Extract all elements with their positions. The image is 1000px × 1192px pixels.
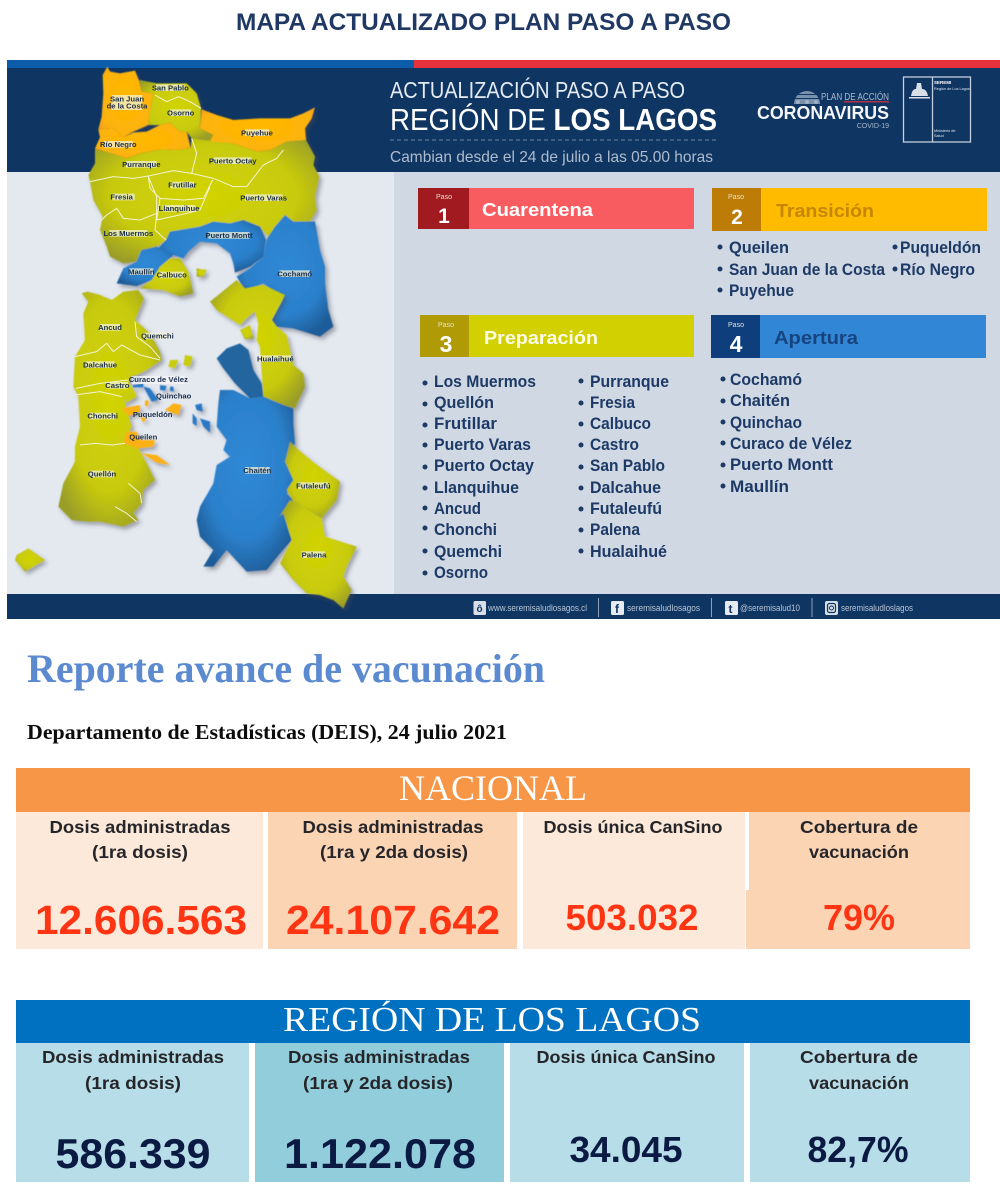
heading: actualización: ACTUALIZACIÓN PASO A PASO	[390, 77, 685, 103]
card: Región 1ra y 2da dosis: (1ra y 2da dosis)	[303, 1073, 453, 1093]
logo: seremi de salud	[904, 77, 970, 142]
map place labels	[83, 83, 331, 559]
card: Región 1ra dosis: (1ra dosis)	[85, 1073, 181, 1093]
step 3 header: Preparación: Preparación	[484, 327, 598, 348]
banner navy header	[7, 68, 1000, 172]
footer social links	[474, 598, 913, 617]
region: Hualaihué	[210, 280, 305, 408]
card: Nacional 1ra dosis: (1ra dosis)	[92, 842, 188, 862]
labels north: San Pablo	[152, 83, 189, 92]
step 2 header: Transición	[712, 188, 987, 231]
labels south: Castro	[105, 381, 130, 390]
step 3 list: Castro	[590, 435, 639, 454]
subheading: date: Cambian desde el 24 de julio a las 05.00 horas	[390, 149, 713, 166]
labels north: Puerto Montt	[205, 231, 253, 240]
twitter link: t	[728, 602, 732, 616]
step 3 list	[422, 372, 669, 582]
Nacional header: NACIONAL	[399, 768, 587, 808]
step 3 list: Ancud	[434, 499, 481, 518]
region: Cochamó	[237, 215, 333, 337]
Región header	[16, 999, 970, 1043]
region: Chaitén north	[217, 343, 263, 398]
step 3 list: Hualaihué	[590, 542, 667, 561]
step 4 list: Puerto Montt	[730, 455, 833, 474]
step 3 list: Osorno	[434, 563, 488, 582]
panel: Región de Los Lagos	[16, 999, 970, 1182]
labels north: Los Muermos	[103, 229, 153, 238]
labels north: Maullín	[128, 267, 155, 276]
step 2 header: Transición: Transición	[776, 200, 874, 221]
card: Nacional 1ra y 2da dosis	[268, 812, 517, 949]
region: San Juan de la Costa	[98, 67, 153, 137]
labels south: Ancud	[98, 323, 122, 332]
step 4 header: Apertura: Paso	[728, 322, 744, 329]
website link: ô	[476, 604, 483, 615]
card: Nacional CanSino: 503.032	[566, 897, 698, 938]
step 4 header: Apertura: 4	[730, 331, 743, 357]
card: Región CanSino: 34.045	[570, 1129, 682, 1170]
card: Región cobertura	[750, 1043, 970, 1182]
labels south: Dalcahue	[83, 360, 117, 369]
banner navy footer	[7, 594, 1000, 619]
website link: www.seremisaludlosagos.cl	[487, 603, 587, 613]
region: Puerto Montt	[158, 220, 266, 273]
labels south: Quellón	[88, 470, 117, 479]
region: Calbuco	[140, 258, 193, 297]
region: small Dalcahue islands	[120, 355, 193, 403]
step 4 header: Apertura: Apertura	[774, 327, 859, 348]
panel: Paso a Paso banner	[7, 60, 1000, 619]
card: Región cobertura: vacunación	[809, 1073, 909, 1093]
region: Palena	[279, 500, 357, 608]
labels south: Hualaihué	[257, 354, 294, 363]
labels north: San Juan	[110, 95, 144, 104]
logo: seremi de salud: Región de Los Lagos	[934, 87, 970, 91]
step 3 list: Quemchi	[434, 542, 502, 561]
step 3 list: Quellón	[434, 393, 494, 412]
region: Chaitén islands	[193, 403, 210, 433]
labels south: Quemchi	[141, 332, 174, 341]
step 3 header: Preparación: Paso	[438, 322, 454, 329]
labels north: Llanquihue	[159, 204, 199, 213]
facebook link	[611, 601, 700, 616]
region: Chiloé island in preparation	[58, 290, 162, 527]
twitter link: @seremisalud10	[740, 603, 800, 613]
labels north: Calbuco	[157, 271, 187, 280]
card: Región CanSino: Dosis única CanSino	[536, 1047, 716, 1067]
logo: seremi de salud: Salud	[934, 134, 944, 138]
card: Región 1ra dosis: 586.339	[56, 1130, 210, 1177]
steps panel background	[394, 172, 1000, 595]
step 4 header: Apertura	[711, 315, 986, 358]
step 3 list: Llanquihue	[434, 478, 519, 497]
labels south: Chaitén	[243, 466, 272, 475]
card: Nacional 1ra dosis: Dosis administradas	[50, 817, 231, 837]
source line: Departamento de Estadísticas (DEIS), 24 julio 2021	[27, 720, 507, 744]
card: Nacional 1ra dosis: 12.606.563	[35, 897, 247, 943]
region: Puyehue	[200, 107, 315, 152]
labels north: Osorno	[167, 108, 195, 117]
region: Guaitecas islet	[15, 548, 45, 572]
labels north: Cochamó	[277, 269, 312, 278]
labels north: Purranque	[122, 160, 160, 169]
step 1 header: Cuarentena: 1	[438, 205, 450, 228]
logo: seremi de salud: Ministerio de	[934, 129, 956, 133]
step 4 list: Maullín	[730, 477, 789, 496]
step 3 list: Futaleufú	[590, 499, 662, 518]
card: Región cobertura: 82,7%	[808, 1129, 908, 1170]
title: MAPA ACTUALIZADO PLAN PASO A PASO	[236, 9, 731, 36]
step 2 list: Queilen	[729, 238, 789, 257]
step 1 header: Cuarentena: Paso	[436, 194, 452, 201]
card: Nacional 1ra y 2da dosis: 24.107.642	[286, 897, 500, 943]
instagram link	[825, 601, 913, 615]
labels south: Palena	[302, 550, 327, 559]
step 3 list: San Pablo	[590, 456, 665, 475]
card: Nacional cobertura	[746, 812, 970, 949]
labels south: Curaco de Vélez	[129, 375, 188, 384]
step 3 list: Puerto Varas	[434, 435, 531, 454]
card: Nacional CanSino	[523, 812, 745, 949]
region: Curaco de Vélez and Quinchao islands	[132, 376, 174, 402]
map: Chiloé and southern provinces	[15, 268, 357, 608]
region: Maullín	[117, 247, 173, 286]
labels north: Puerto Varas	[240, 193, 287, 202]
twitter link	[725, 601, 800, 616]
card: Región 1ra y 2da dosis	[255, 1043, 504, 1182]
step 3 list: Puerto Octay	[434, 456, 535, 475]
step 4 list: Chaitén	[730, 391, 790, 410]
step 3 list: Purranque	[590, 372, 669, 391]
card: Región 1ra dosis: Dosis administradas	[42, 1047, 224, 1067]
step 3 header: Preparación: 3	[440, 331, 452, 357]
icon: coat of arms	[909, 83, 930, 98]
step 1 header: Cuarentena	[418, 188, 694, 229]
panel: Nacional	[16, 768, 970, 949]
step 3 header: Preparación	[420, 315, 694, 357]
card: Nacional cobertura: 79%	[823, 897, 895, 938]
Nacional header	[16, 768, 970, 812]
facebook link: seremisaludlosagos	[627, 603, 700, 613]
card: Región 1ra dosis	[16, 1043, 249, 1182]
labels north	[100, 83, 312, 280]
labels south	[83, 323, 331, 559]
step 2 list	[718, 238, 981, 300]
labels south: Chonchi	[87, 412, 118, 421]
card: Región 1ra y 2da dosis: 1.122.078	[284, 1130, 476, 1177]
step 2 list: San Juan de la Costa	[729, 260, 885, 279]
step 2 list: Puqueldón	[900, 238, 981, 257]
region: Queilen	[123, 432, 170, 465]
banner colour strip	[7, 60, 1000, 68]
card: Región CanSino	[510, 1043, 744, 1182]
card: Nacional 1ra y 2da dosis: Dosis administradas	[302, 817, 484, 837]
logo: plan de acción coronavirus: CORONAVIRUS	[757, 102, 889, 123]
logo: plan de acción coronavirus: PLAN DE ACCIÓN	[821, 90, 889, 103]
step 2 list: Río Negro	[900, 260, 975, 279]
region: Osorno and San Pablo	[139, 80, 213, 141]
card: Región cobertura: Cobertura de	[800, 1047, 918, 1067]
region: Chaitén	[197, 390, 295, 572]
logo: seremi de salud: SEREMI	[934, 80, 951, 85]
instagram link: seremisaludloslagos	[841, 603, 913, 613]
Región header: REGIÓN DE LOS LAGOS	[283, 999, 701, 1039]
labels north: Puerto Octay	[209, 156, 257, 165]
logo: plan de acción coronavirus: COVID-19	[857, 123, 889, 130]
labels south: Queilen	[129, 432, 158, 441]
logo: plan de acción coronavirus	[757, 90, 889, 130]
labels north: Río Negro	[100, 140, 137, 149]
card: Nacional CanSino: Dosis única CanSino	[544, 817, 722, 837]
map: commune borders Chiloé	[74, 322, 160, 522]
labels south: Quinchao	[156, 392, 192, 401]
card: Nacional 1ra y 2da dosis: (1ra y 2da dosis)	[320, 842, 468, 862]
map: commune borders north	[90, 95, 283, 240]
website link	[474, 601, 587, 615]
step 3 list: Palena	[590, 520, 640, 539]
step 4 list: Curaco de Vélez	[730, 434, 852, 453]
labels south: Futaleufú	[296, 481, 331, 490]
step 3 list: Chonchi	[434, 520, 497, 539]
labels north: Frutillar	[168, 181, 197, 190]
labels north: de la Costa	[107, 101, 148, 110]
labels north: Puyehue	[241, 128, 273, 137]
card: Nacional cobertura: vacunación	[809, 842, 909, 862]
banner light background	[7, 172, 1000, 595]
step 2 header: Transición: 2	[731, 206, 743, 229]
step 3 list: Los Muermos	[434, 372, 536, 391]
step 4 list: Quinchao	[730, 413, 802, 432]
step 2 list: Puyehue	[729, 281, 794, 300]
step 3 list: Frutillar	[434, 414, 497, 433]
card: Nacional 1ra dosis	[16, 812, 263, 949]
map: Los Lagos northern provinces	[88, 67, 333, 337]
step 4 list	[720, 370, 852, 496]
card: Región 1ra y 2da dosis: Dosis administradas	[288, 1047, 470, 1067]
region: Llanquihue province in preparation	[88, 138, 319, 263]
heading: región de los lagos: REGIÓN DE LOS LAGOS	[390, 102, 717, 137]
region: Calbuco island	[197, 268, 207, 277]
facebook link: f	[615, 602, 620, 616]
step 3 list: Fresia	[590, 393, 635, 412]
region: Hualaihué inlet island	[240, 325, 253, 339]
step 3 list: Dalcahue	[590, 478, 661, 497]
step 3 list: Calbuco	[590, 414, 651, 433]
step 4 list: Cochamó	[730, 370, 802, 389]
labels north: Fresia	[110, 193, 134, 202]
region: Futaleufú	[285, 442, 340, 518]
region: Río Negro	[95, 123, 191, 158]
step 2 header: Transición: Paso	[728, 194, 744, 201]
icon: dome	[794, 91, 820, 104]
labels south: Puqueldón	[133, 410, 173, 419]
heading: reporte avance de vacunación: Reporte avance de vacunación	[27, 646, 545, 691]
region: Puqueldón	[122, 400, 182, 423]
step 1 header: Cuarentena: Cuarentena	[482, 199, 594, 220]
card: Nacional cobertura: Cobertura de	[800, 817, 918, 837]
